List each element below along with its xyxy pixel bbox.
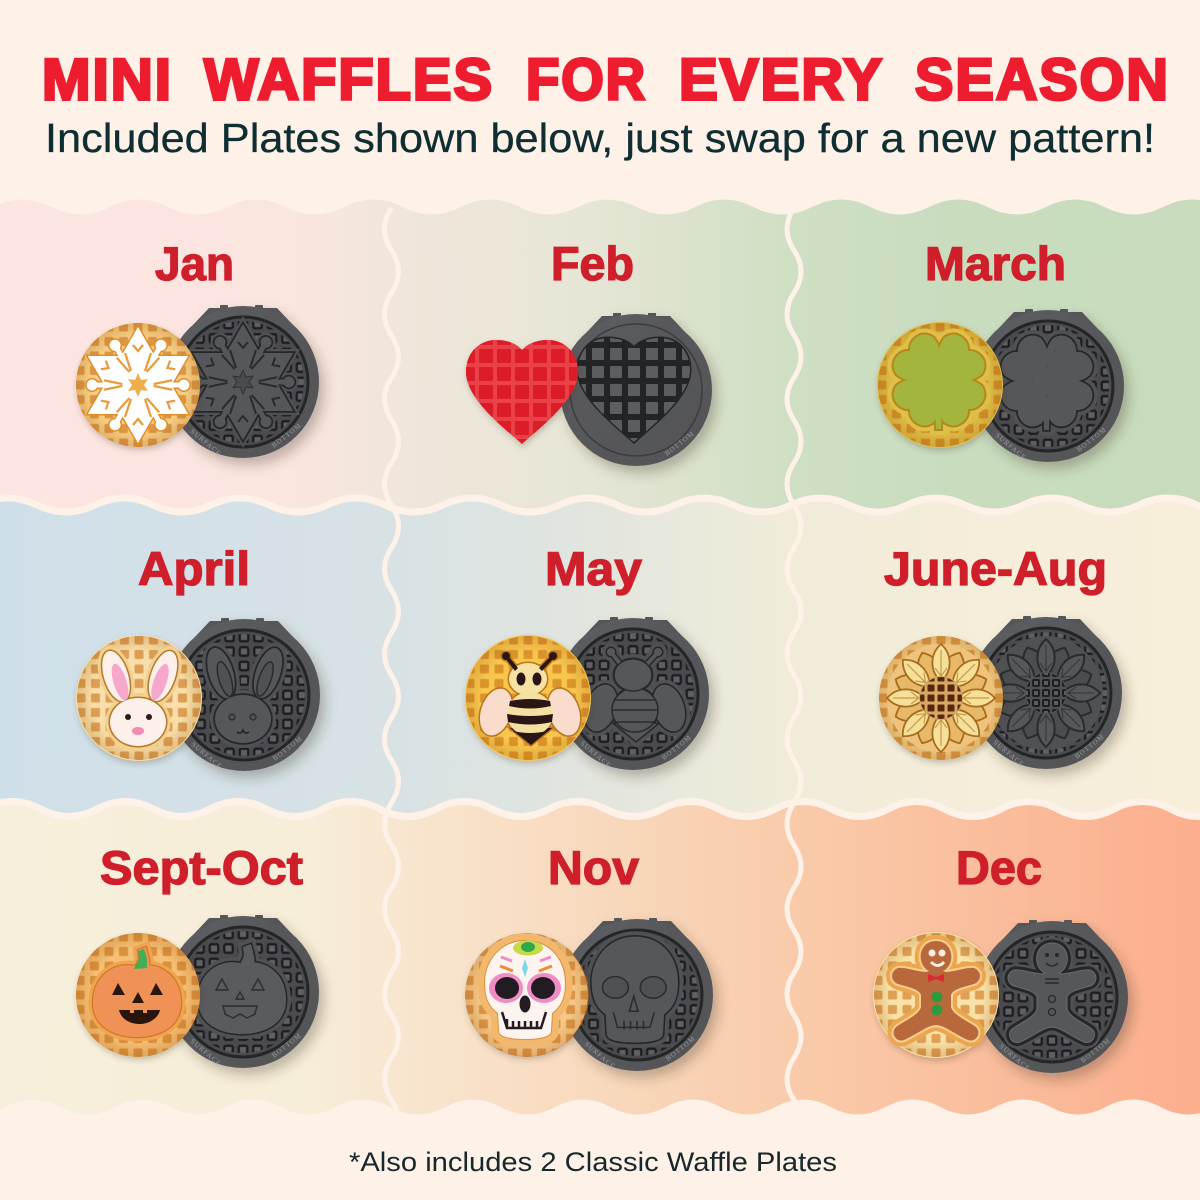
panel: Jan — [0, 207, 390, 503]
panel: April — [0, 510, 390, 806]
heading: May: May — [545, 542, 642, 595]
footnote: *Also includes 2 Classic Waffle Plates — [349, 1147, 837, 1177]
subtitle: Included Plates shown below, just swap for a new pattern! — [45, 115, 1155, 161]
plate: skull — [561, 918, 713, 1071]
title: EVERY — [679, 48, 884, 112]
panel: Sept-Oct — [0, 812, 390, 1108]
panel: June-Aug — [796, 510, 1200, 806]
heading: Feb: Feb — [551, 237, 634, 290]
title: WAFFLES — [204, 48, 494, 112]
waffle: gingerbread — [873, 932, 999, 1058]
title: FOR — [526, 48, 647, 112]
waffle: sugar skull — [465, 933, 589, 1057]
heading: Sept-Oct: Sept-Oct — [100, 841, 303, 894]
waffle: pumpkin — [76, 933, 200, 1057]
waffle: bunny — [76, 635, 202, 761]
plate: heart: BOTTOM — [663, 429, 696, 458]
panel row 2 background — [0, 498, 1200, 900]
plate: heart — [560, 313, 712, 466]
heading: Nov: Nov — [548, 841, 639, 894]
panel row 1 background — [0, 200, 1200, 600]
plate: clover — [972, 309, 1124, 462]
bottom background band — [0, 1100, 1200, 1200]
panel: Nov — [392, 812, 794, 1108]
waffle: snowflake — [76, 323, 200, 447]
heading: April: April — [138, 542, 250, 595]
plate: bee — [557, 617, 709, 770]
waffle: bee — [465, 635, 591, 761]
plate: bunny — [168, 618, 320, 771]
waffle: red heart — [466, 340, 578, 444]
heading: Jan: Jan — [155, 237, 234, 290]
panel: Feb — [392, 207, 794, 503]
title: MINI — [42, 48, 173, 112]
heading: June-Aug: June-Aug — [884, 542, 1107, 595]
waffle: sunflower — [879, 636, 1003, 760]
plate: sunflower — [970, 616, 1122, 769]
heading: Dec: Dec — [956, 841, 1042, 894]
plate: pumpkin — [167, 915, 319, 1068]
title: SEASON — [915, 48, 1170, 112]
panel: Dec — [796, 812, 1200, 1108]
plate: snowflake — [167, 305, 319, 458]
panel: May — [392, 510, 794, 806]
plate: gingerbread — [976, 920, 1128, 1073]
title — [42, 48, 1170, 112]
panel row 3 background — [0, 802, 1200, 1150]
panel: March — [796, 207, 1200, 503]
waffle: clover — [877, 322, 1003, 448]
heading: March: March — [925, 237, 1066, 290]
